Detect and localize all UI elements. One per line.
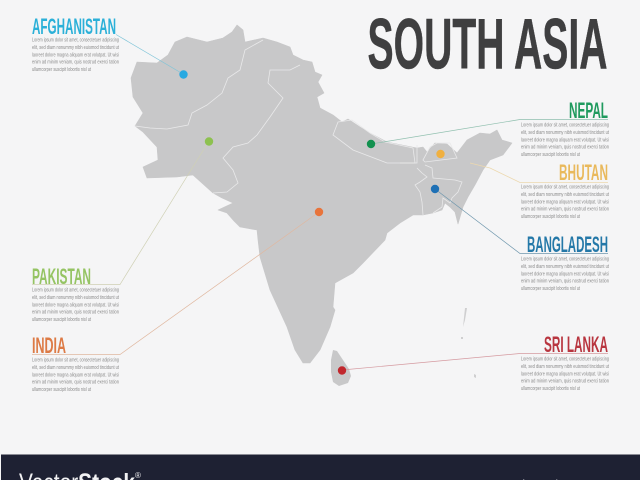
text block: enim ad minim veniam, quis nostrud exerci tation [521, 379, 609, 385]
dot: Bangladesh [431, 185, 439, 193]
text block: ullamcorper suscipit lobortis nisl ut [521, 386, 580, 392]
text block: laoreet dolore magna aliquam erat volutpat. Ut wisi [32, 302, 119, 308]
dot: India [315, 208, 323, 216]
dot: Afghanistan [179, 70, 188, 79]
text block [32, 358, 119, 393]
connector: Pakistan [32, 141, 209, 284]
text block: ullamcorper suscipit lobortis nisl ut [521, 152, 580, 158]
connector: Bangladesh [435, 189, 608, 254]
footer bar [1, 454, 640, 480]
text block: enim ad minim veniam, quis nostrud exerci tation [32, 380, 119, 386]
text block: elit, sed diam nonummy nibh euismod tincidunt ut [521, 130, 609, 136]
text block: enim ad minim veniam, quis nostrud exerci tation [521, 279, 609, 285]
Maldives and small islands [461, 308, 476, 378]
dot: Sri Lanka [338, 366, 346, 375]
text block: elit, sed diam nonummy nibh euismod tincidunt ut [32, 45, 119, 51]
panel: India [32, 333, 119, 393]
text block: laoreet dolore magna aliquam erat volutpat. Ut wisi [32, 372, 119, 378]
text block [521, 122, 609, 158]
country borders [135, 40, 462, 215]
registered mark: ® [135, 471, 141, 480]
text block: enim ad minim veniam, quis nostrud exerci tation [521, 145, 609, 151]
text block: enim ad minim veniam, quis nostrud exerci tation [521, 207, 609, 213]
panel: Afghanistan [32, 14, 119, 73]
text block [521, 356, 609, 392]
text block: enim ad minim veniam, quis nostrud exerci tation [32, 60, 119, 66]
text block: enim ad minim veniam, quis nostrud exerci tation [32, 310, 119, 316]
text block: ullamcorper suscipit lobortis nisl ut [521, 286, 580, 292]
text block: laoreet dolore magna aliquam erat volutpat. Ut wisi [32, 52, 119, 58]
text block: ullamcorper suscipit lobortis nisl ut [32, 67, 91, 73]
connector: Afghanistan [116, 34, 183, 74]
text block: elit, sed diam nonummy nibh euismod tincidunt ut [521, 364, 609, 370]
panel: Pakistan [32, 264, 119, 323]
text block: elit, sed diam nonummy nibh euismod tincidunt ut [521, 192, 609, 198]
connector: India [32, 212, 319, 354]
heading: AFGHANISTAN [32, 14, 116, 39]
panel: Bhutan [521, 160, 609, 220]
text block: ullamcorper suscipit lobortis nisl ut [32, 317, 91, 323]
text block [32, 38, 119, 73]
text block: Lorem ipsum dolor sit amet, consectetuer adipiscing [32, 358, 119, 364]
text block [32, 288, 119, 323]
map of South Asia [131, 25, 512, 386]
text block [521, 184, 609, 220]
landmass [131, 25, 512, 363]
panel: Sri Lanka [521, 332, 609, 392]
connector: Nepal [371, 120, 608, 144]
connector: Bhutan [470, 163, 608, 182]
panel: Bangladesh [521, 232, 609, 292]
text block [521, 256, 609, 292]
dot: Pakistan [205, 137, 213, 146]
dot: Bhutan [436, 150, 445, 158]
heading: PAKISTAN [32, 264, 91, 289]
heading: INDIA [32, 333, 66, 358]
text block: ullamcorper suscipit lobortis nisl ut [32, 387, 91, 393]
Sri Lanka [331, 350, 351, 386]
heading: NEPAL [569, 98, 608, 123]
dot: Nepal [367, 140, 375, 148]
text block: Lorem ipsum dolor sit amet, consectetuer adipiscing [32, 38, 119, 44]
text block: ullamcorper suscipit lobortis nisl ut [521, 214, 580, 220]
text block: elit, sed diam nonummy nibh euismod tincidunt ut [32, 365, 119, 371]
text block: elit, sed diam nonummy nibh euismod tincidunt ut [521, 264, 609, 270]
text block: Lorem ipsum dolor sit amet, consectetuer adipiscing [32, 288, 119, 294]
connector: Sri Lanka [342, 354, 608, 370]
panel: Nepal [521, 98, 609, 158]
text block: elit, sed diam nonummy nibh euismod tincidunt ut [32, 295, 119, 301]
